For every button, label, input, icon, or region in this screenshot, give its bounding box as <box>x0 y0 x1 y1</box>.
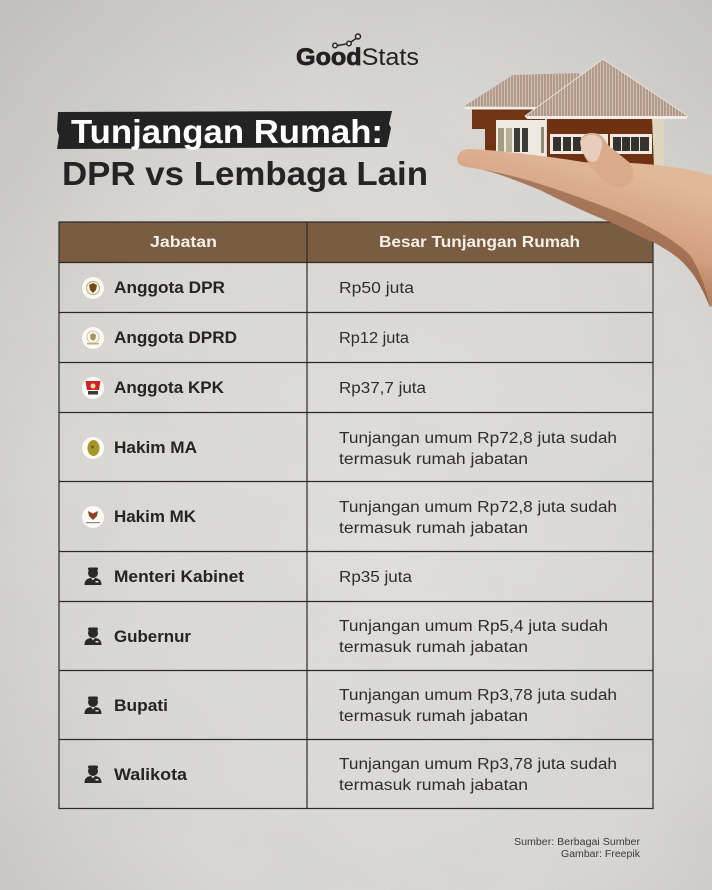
source note <box>514 837 641 860</box>
icon: official <box>84 568 102 585</box>
row: Menteri Kabinet: Menteri Kabinet <box>114 568 245 586</box>
row: Anggota DPRD: Anggota DPRD <box>114 329 237 347</box>
row: Gubernur <box>84 618 608 656</box>
icon: MK emblem <box>82 506 104 528</box>
icon: logo trend line <box>333 34 360 48</box>
row: Walikota <box>84 756 617 794</box>
row: Hakim MA: Hakim MA <box>114 439 197 457</box>
hand <box>457 133 712 307</box>
row: Anggota KPK: Rp37,7 juta <box>339 380 426 397</box>
row: Anggota KPK <box>82 377 426 399</box>
row: Anggota DPRD <box>82 327 409 349</box>
right roof <box>525 59 688 118</box>
row: Anggota DPR <box>82 277 414 299</box>
icon: official <box>84 696 102 714</box>
icon: official <box>84 766 102 783</box>
title <box>57 111 428 192</box>
row: Menteri Kabinet: Rp35 juta <box>339 569 412 586</box>
icon: DPR emblem <box>82 277 104 299</box>
icon: MA emblem <box>82 437 104 459</box>
palm and fingers <box>457 149 712 307</box>
illustration: house on a hand <box>457 59 712 307</box>
house <box>463 59 688 167</box>
left roof <box>463 73 600 109</box>
row: Hakim MK <box>82 499 617 537</box>
left wing windows <box>498 127 544 153</box>
source line: Sumber: Berbagai Sumber <box>514 837 641 848</box>
title line 1: Tunjangan Rumah: <box>71 113 383 150</box>
row: Walikota: Tunjangan umum Rp3,78 juta sudah <box>339 756 617 773</box>
row: Hakim MK: Tunjangan umum Rp72,8 juta sudah <box>339 499 617 516</box>
row: Anggota DPRD: Rp12 juta <box>339 330 409 347</box>
icon: KPK emblem <box>82 377 104 399</box>
row: Anggota DPR: Rp50 juta <box>339 280 414 297</box>
row: Anggota KPK: Anggota KPK <box>114 379 224 397</box>
table header <box>59 222 653 262</box>
right wing wall <box>547 117 664 167</box>
table grid lines <box>59 222 653 808</box>
thumb <box>580 133 633 187</box>
row: Hakim MK: termasuk rumah jabatan <box>339 520 528 537</box>
row: Hakim MK: Hakim MK <box>114 508 196 526</box>
row: Gubernur: termasuk rumah jabatan <box>339 639 528 656</box>
row: Hakim MA: Tunjangan umum Rp72,8 juta sudah <box>339 430 617 447</box>
row: Bupati <box>84 687 617 725</box>
row: Walikota: termasuk rumah jabatan <box>339 777 528 794</box>
row: Anggota DPR: Anggota DPR <box>114 279 225 297</box>
title highlight band <box>57 111 392 149</box>
row: Bupati: Bupati <box>114 697 168 715</box>
row: Gubernur: Gubernur <box>114 628 192 646</box>
row: Bupati: termasuk rumah jabatan <box>339 708 528 725</box>
title line 2: DPR vs Lembaga Lain <box>62 155 428 192</box>
header: Besar Tunjangan Rumah: Besar Tunjangan Rumah <box>379 234 580 251</box>
row: Gubernur: Tunjangan umum Rp5,4 juta sudah <box>339 618 608 635</box>
thumbnail <box>581 135 602 162</box>
hand underside shadow <box>480 169 710 307</box>
right wing window frames <box>550 134 652 154</box>
logo wordmark: GoodStats <box>296 44 419 71</box>
row: Walikota: Walikota <box>114 766 188 784</box>
icon: official <box>84 628 102 645</box>
table <box>59 222 653 808</box>
row: Hakim MA <box>82 430 617 468</box>
row: Menteri Kabinet <box>84 568 412 586</box>
image credit line: Gambar: Freepik <box>561 849 641 860</box>
logo: GoodStats <box>296 34 419 71</box>
header: Jabatan: Jabatan <box>150 234 217 251</box>
row: Hakim MA: termasuk rumah jabatan <box>339 451 528 468</box>
icon: DPRD emblem <box>82 327 104 349</box>
row: Bupati: Tunjangan umum Rp3,78 juta sudah <box>339 687 617 704</box>
left wing wall <box>472 109 545 156</box>
